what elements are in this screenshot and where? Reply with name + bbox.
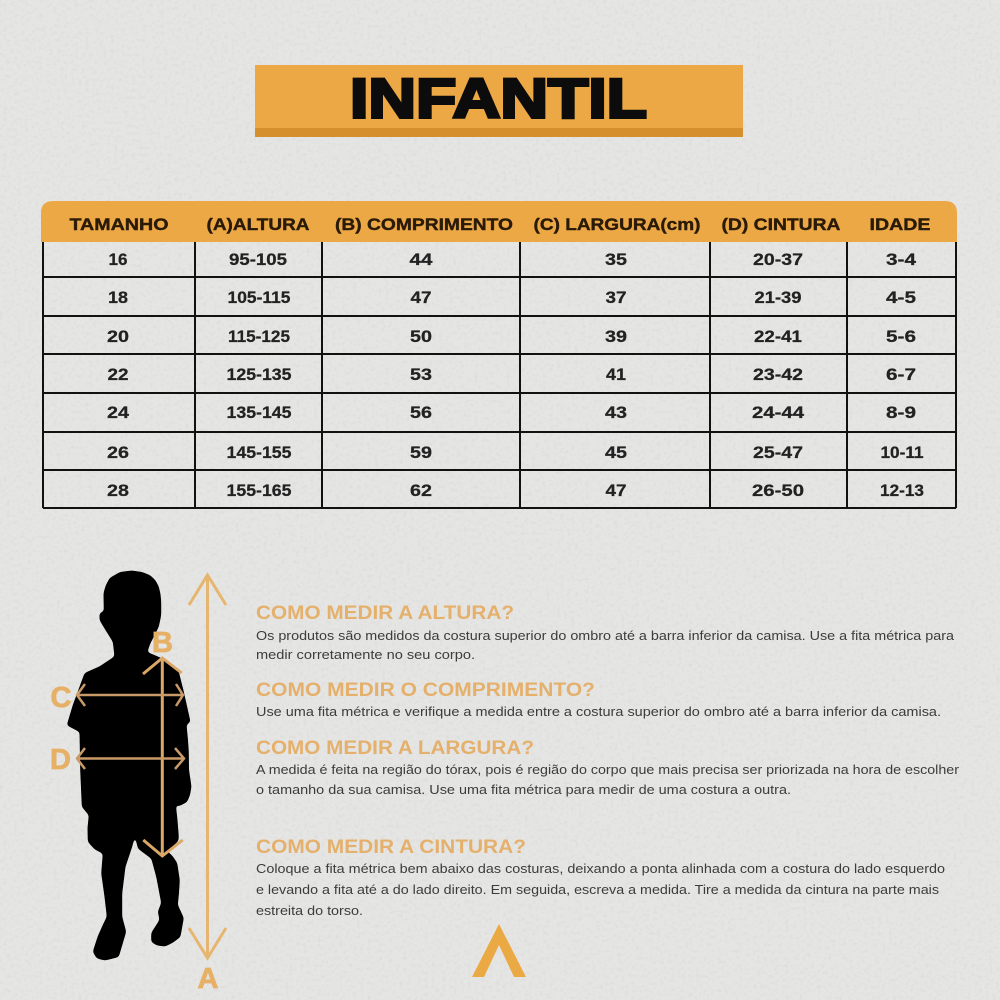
table row 22: 53 [410, 365, 432, 384]
table row 16: 44 [410, 250, 433, 269]
title banner [255, 65, 743, 137]
table header: IDADE [870, 215, 930, 234]
table row 22: 125-135 [226, 365, 292, 384]
table row 16: 95-105 [229, 250, 287, 269]
table row 28: 28 [107, 481, 129, 500]
section: cintura: Coloque a fita métrica bem abaixo das costuras, deixando a ponta alinhada com a costura do lado esquerdo [256, 862, 945, 876]
table row 22 [108, 365, 916, 384]
section: comprimento [256, 680, 941, 719]
table row 18: 105-115 [228, 288, 290, 307]
table row 24: 8-9 [886, 403, 916, 422]
arrow B: length [143, 658, 183, 856]
table row 18 [108, 288, 916, 307]
table row 26 [107, 443, 924, 462]
table row 20: 115-125 [228, 327, 290, 346]
arrow A: height [189, 575, 226, 958]
table header: (A)ALTURA [206, 215, 310, 234]
table row 28: 26-50 [752, 481, 804, 500]
table row 28: 47 [606, 481, 626, 500]
table row 28: 155-165 [226, 481, 292, 500]
label C: C [51, 682, 72, 714]
table row 20: 22-41 [754, 327, 802, 346]
table row 20: 50 [410, 327, 432, 346]
table row 22: 41 [606, 365, 626, 384]
table row 24 [107, 403, 916, 422]
table header [41, 201, 957, 242]
section: altura [256, 603, 954, 662]
table row 26: 145-155 [226, 443, 292, 462]
section: cintura: estreita do torso. [256, 904, 363, 918]
table row 26: 10-11 [880, 443, 924, 462]
label A: A [198, 963, 219, 995]
size table [41, 201, 957, 508]
table row 18: 47 [410, 288, 432, 307]
section: comprimento: Use uma fita métrica e verifique a medida entre a costura superior do ombro até a barra inferior da camisa. [256, 705, 941, 719]
label D: D [50, 744, 71, 776]
table row 28 [107, 481, 924, 500]
table row 18: 21-39 [754, 288, 802, 307]
table row 16: 20-37 [753, 250, 803, 269]
table row 16: 3-4 [886, 250, 917, 269]
table row 22: 6-7 [886, 365, 916, 384]
section: cintura [256, 837, 945, 918]
table row 26: 45 [605, 443, 627, 462]
table header: (B) COMPRIMENTO [335, 215, 513, 234]
table header: TAMANHO [70, 215, 168, 234]
table row 20 [107, 327, 916, 346]
section: altura: Os produtos são medidos da costura superior do ombro até a barra inferior da camisa. Use a fita métrica para [256, 629, 954, 643]
table row 24: 24 [107, 403, 130, 422]
table row 24: 43 [605, 403, 627, 422]
section: altura: COMO MEDIR A ALTURA? [256, 603, 514, 624]
section: largura: A medida é feita na região do tórax, pois é região do corpo que mais precisa ser priorizada na hora de escolher [256, 763, 959, 777]
section: cintura: COMO MEDIR A CINTURA? [256, 837, 526, 858]
table row 16 [108, 250, 917, 269]
section: altura: medir corretamente no seu corpo. [256, 648, 475, 662]
table row 26: 26 [107, 443, 129, 462]
table row 20: 39 [605, 327, 627, 346]
table row 20: 5-6 [886, 327, 916, 346]
table header: (D) CINTURA [722, 215, 840, 234]
table row 24: 56 [410, 403, 432, 422]
arrow C: width [77, 684, 183, 706]
child silhouette [67, 571, 191, 960]
table row 22: 23-42 [753, 365, 803, 384]
section: cintura: e levando a fita até a do lado direito. Em seguida, escreva a medida. Tire a medida da cintura na parte mais [256, 883, 939, 897]
section: largura: o tamanho da sua camisa. Use uma fita métrica para medir de uma costura a outra. [256, 783, 791, 797]
table row 16: 16 [108, 250, 128, 269]
table row 24: 24-44 [752, 403, 805, 422]
table row 20: 20 [107, 327, 129, 346]
table header: (C) LARGURA(cm) [534, 215, 700, 234]
table row 26: 59 [410, 443, 432, 462]
title banner: INFANTIL [350, 66, 647, 130]
table row 18: 37 [606, 288, 626, 307]
table row 18: 18 [108, 288, 128, 307]
arrow D: waist [77, 748, 184, 769]
section: comprimento: COMO MEDIR O COMPRIMENTO? [256, 680, 595, 701]
label B: B [152, 627, 173, 659]
section: largura [256, 738, 959, 797]
logo: chevron [472, 924, 526, 977]
table row 26: 25-47 [753, 443, 803, 462]
table row 28: 62 [410, 481, 432, 500]
table row 18: 4-5 [886, 288, 916, 307]
table row 16: 35 [605, 250, 627, 269]
table row 22: 22 [108, 365, 128, 384]
table row 24: 135-145 [226, 403, 292, 422]
table row 28: 12-13 [880, 481, 924, 500]
section: largura: COMO MEDIR A LARGURA? [256, 738, 534, 759]
